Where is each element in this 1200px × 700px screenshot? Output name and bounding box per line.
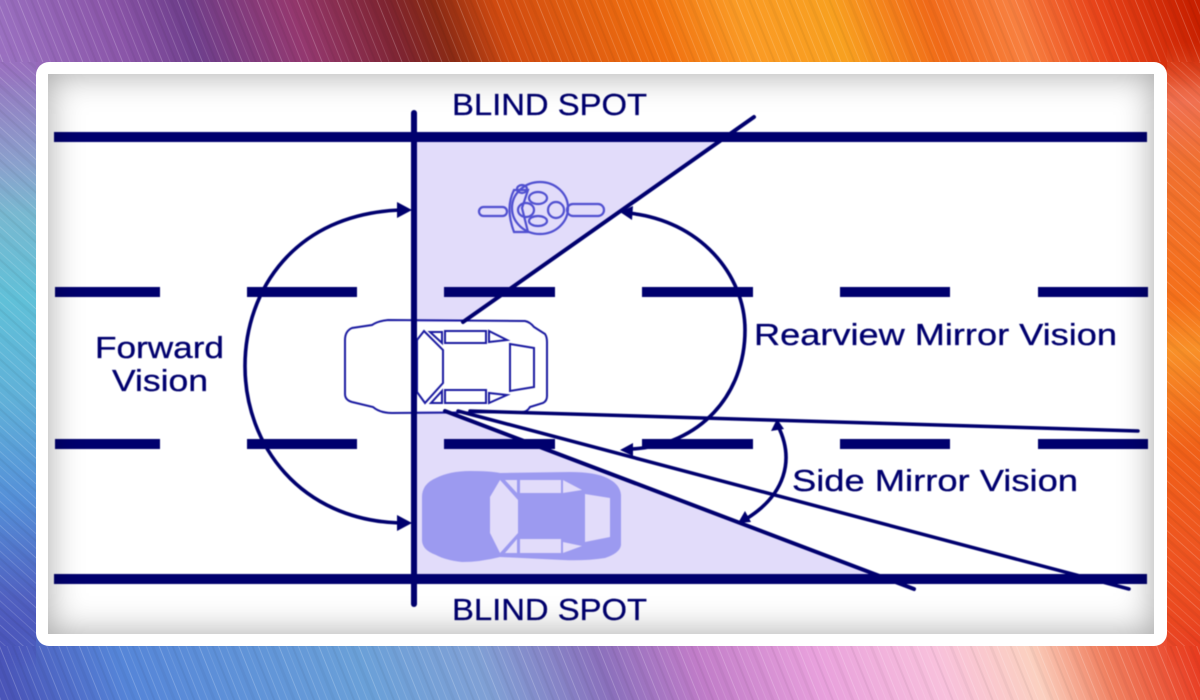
arrow: forward vision arc	[245, 202, 412, 531]
lane dashes: upper	[55, 287, 1148, 297]
arrow: rearview mirror arc	[620, 206, 745, 456]
blind spot zone: bottom	[417, 411, 875, 574]
vertical driver line	[411, 113, 417, 604]
side mirror sight lines	[445, 411, 1138, 589]
rearview vision line	[463, 117, 754, 322]
label: rearview mirror vision: Rearview Mirror Vision	[754, 317, 1117, 352]
icon: main car outline	[345, 320, 547, 413]
label: side mirror vision: Side Mirror Vision	[792, 463, 1078, 498]
lane dashes: lower	[55, 439, 1148, 449]
label: forward vision: Vision	[112, 363, 208, 398]
arrow: side mirror arc	[738, 419, 786, 523]
road edges	[54, 132, 1147, 584]
heading: bottom blind spot: BLIND SPOT	[452, 592, 647, 627]
icon: car in blind spot	[422, 471, 621, 562]
panel: white card	[36, 62, 1167, 646]
icon: bicycle in blind spot	[479, 182, 604, 234]
blind spot zone: top	[417, 141, 720, 322]
heading: top blind spot: BLIND SPOT	[452, 87, 647, 122]
label: forward vision: Forward	[95, 330, 224, 365]
label: forward vision	[95, 330, 224, 398]
